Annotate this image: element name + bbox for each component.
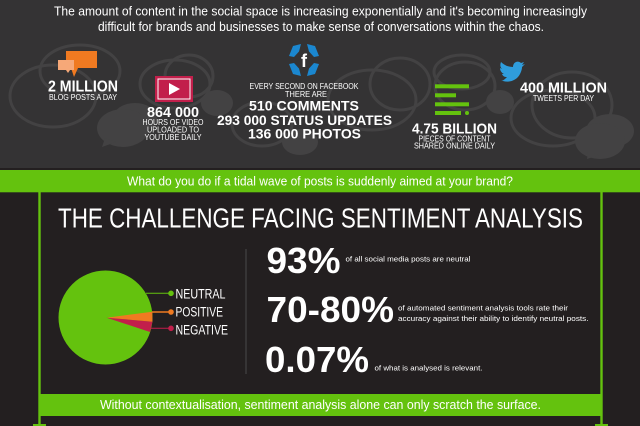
stat: facebook per second: THERE ARE: [285, 89, 327, 99]
stat: 0.07%: [265, 339, 482, 380]
legend: neutral: [146, 286, 226, 301]
stat: 864 000 youtube: YOUTUBE DAILY: [144, 132, 202, 142]
top green banner: What do you do if a tidal wave of posts is suddenly aimed at your brand?: [127, 174, 513, 188]
legend: positive: [152, 305, 223, 320]
stat: 400 million tweets: 400 MILLION: [520, 80, 607, 96]
stat: 70-80%: of automated sentiment analysis tools rate their: [398, 304, 569, 313]
intro text: difficult for brands and businesses to make sense of conversations within the chaos.: [98, 20, 544, 34]
stat: facebook per second: 293 000 STATUS UPDATES: [217, 112, 392, 128]
pie chart: [58, 270, 152, 364]
stat: 400 million tweets: TWEETS PER DAY: [533, 93, 594, 103]
stat: 70-80%: 70-80%: [266, 289, 394, 330]
icon: twitter bird: [500, 62, 525, 82]
legend: negative: [151, 322, 228, 337]
stat: facebook per second: EVERY SECOND ON FACEBOOK: [250, 81, 359, 91]
stat: 93%: 93%: [266, 240, 340, 281]
intro text: [54, 4, 588, 34]
legend: positive: POSITIVE: [176, 305, 223, 320]
icon: orange speech bubbles: [58, 51, 97, 77]
icon: facebook arrows: [289, 44, 319, 76]
bottom green banner: [40, 394, 602, 416]
top green banner: [0, 170, 640, 192]
stat: facebook per second: 136 000 PHOTOS: [248, 126, 361, 142]
stat: 864 000 youtube: [142, 105, 204, 142]
icon: green content lines: [435, 84, 469, 115]
stat: 70-80%: accuracy against their ability to identify neutral posts.: [398, 314, 588, 323]
stat: 2 million blog posts: [48, 78, 118, 102]
legend: neutral: NEUTRAL: [176, 286, 226, 301]
stat: facebook per second: 510 COMMENTS: [249, 98, 359, 114]
stat: 4.75 billion: SHARED ONLINE DAILY: [414, 141, 495, 151]
stat: 864 000 youtube: HOURS OF VIDEO: [142, 117, 204, 127]
stat: 2 million blog posts: BLOG POSTS A DAY: [49, 92, 117, 102]
bottom green banner: Without contextualisation, sentiment analysis alone can only scratch the surface.: [100, 398, 541, 412]
stat: 0.07%: of what is analysed is relevant.: [374, 364, 482, 373]
stat: 864 000 youtube: 864 000: [147, 105, 199, 121]
stat: 4.75 billion: PIECES OF CONTENT: [418, 134, 490, 144]
stat: 4.75 billion: [412, 120, 497, 151]
icon: facebook arrows: f: [301, 51, 308, 71]
stat: 4.75 billion: 4.75 BILLION: [412, 120, 497, 138]
panel frame lines: [33, 192, 608, 426]
stat: 70-80%: [266, 289, 588, 330]
stat: facebook per second: [217, 81, 392, 142]
stat: 93%: of all social media posts are neutral: [346, 255, 471, 264]
icon: video play: [155, 76, 193, 102]
stat: 0.07%: 0.07%: [265, 339, 369, 380]
intro text: The amount of content in the social space is increasing exponentially and it's becoming increasingly: [54, 4, 588, 18]
stat: 2 million blog posts: 2 MILLION: [48, 78, 118, 96]
legend: negative: NEGATIVE: [176, 322, 228, 337]
stat: 864 000 youtube: UPLOADED TO: [147, 124, 199, 134]
stat: 93%: [266, 240, 471, 281]
